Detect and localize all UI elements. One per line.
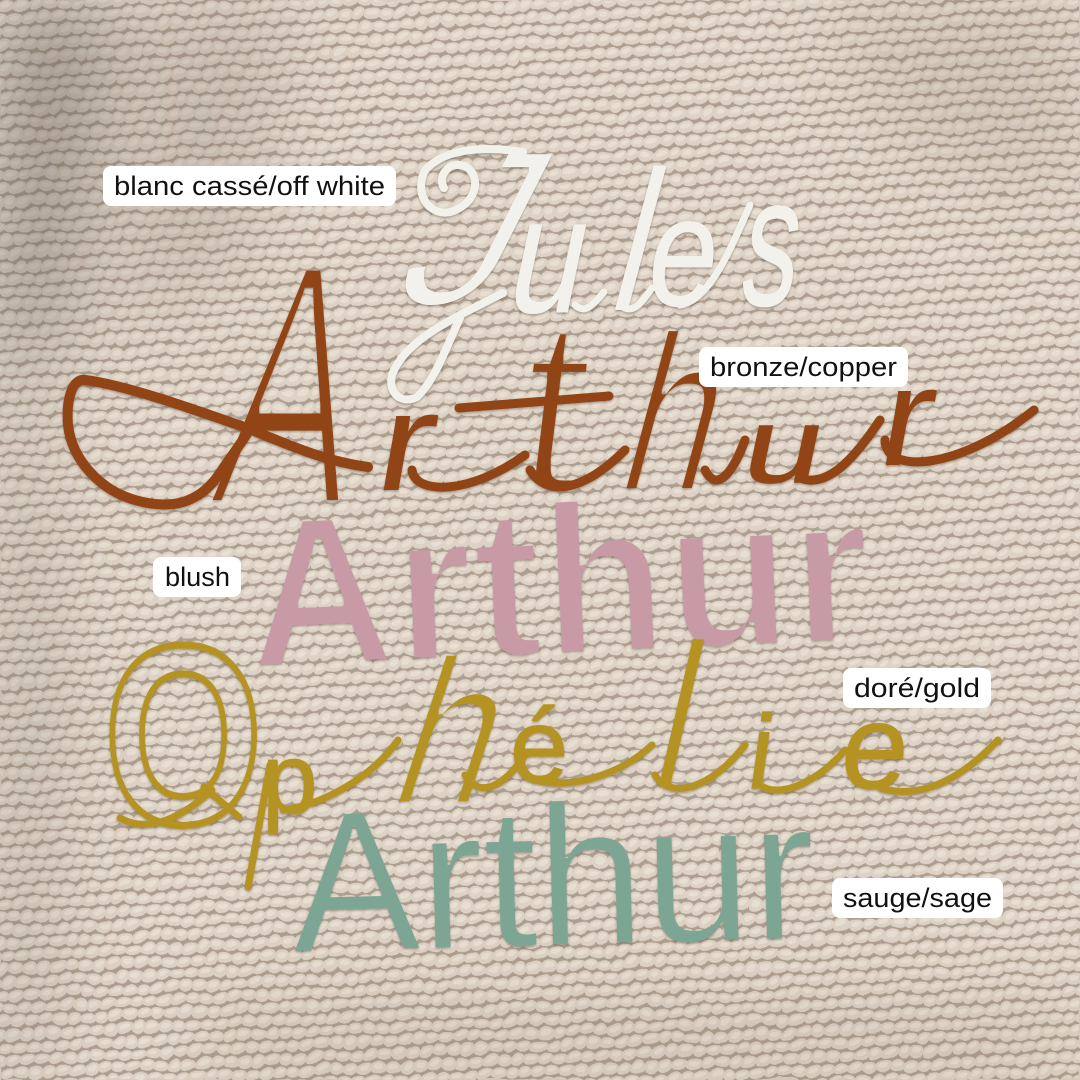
embroidered name: Arthur, bronze (68, 192, 1034, 577)
label: doré/gold (843, 668, 991, 708)
label: bronze/copper (699, 347, 908, 387)
embroidered name: Jules, off white (360, 105, 816, 399)
letter i: i (742, 693, 782, 811)
label: blanc cassé/off white (103, 166, 396, 206)
letter h: h (370, 617, 542, 847)
letter e: e (638, 164, 732, 338)
letter r: r (367, 363, 450, 520)
letter r: r (870, 339, 948, 495)
letter s: s (731, 138, 816, 345)
letter e: e (835, 680, 916, 814)
connecting threads and crossbar (412, 396, 1034, 487)
embroidered name: Ophélie, gold (104, 592, 998, 887)
connecting threads (575, 205, 750, 309)
letter A: A (193, 192, 395, 577)
letter O: O (104, 592, 263, 877)
letter p: p (262, 723, 318, 835)
letter l: l (586, 127, 693, 356)
tails and connecting threads (120, 740, 998, 887)
label: doré/gold: doré/gold (854, 673, 980, 703)
embroidered name: Arthur, sage: Arthur (288, 758, 818, 995)
letter u: u (734, 387, 836, 505)
letter t: t (503, 267, 607, 546)
label: bronze/copper: bronze/copper (710, 352, 897, 382)
label: sauge/sage: sauge/sage (843, 883, 992, 913)
label: blanc cassé/off white: blanc cassé/off white (114, 171, 385, 201)
letter h: h (599, 289, 759, 538)
A swash flourish (68, 380, 368, 505)
letter J: J (360, 105, 597, 353)
embroidered name: Arthur, blush: Arthur (242, 448, 875, 714)
label: blush (153, 557, 241, 597)
label: sauge/sage (832, 878, 1003, 918)
letter é: é (510, 688, 568, 805)
label: blush: blush (165, 562, 230, 592)
letter l: l (630, 599, 731, 835)
letter u: u (495, 164, 608, 348)
J swirl and lower loop flourish (391, 149, 523, 399)
